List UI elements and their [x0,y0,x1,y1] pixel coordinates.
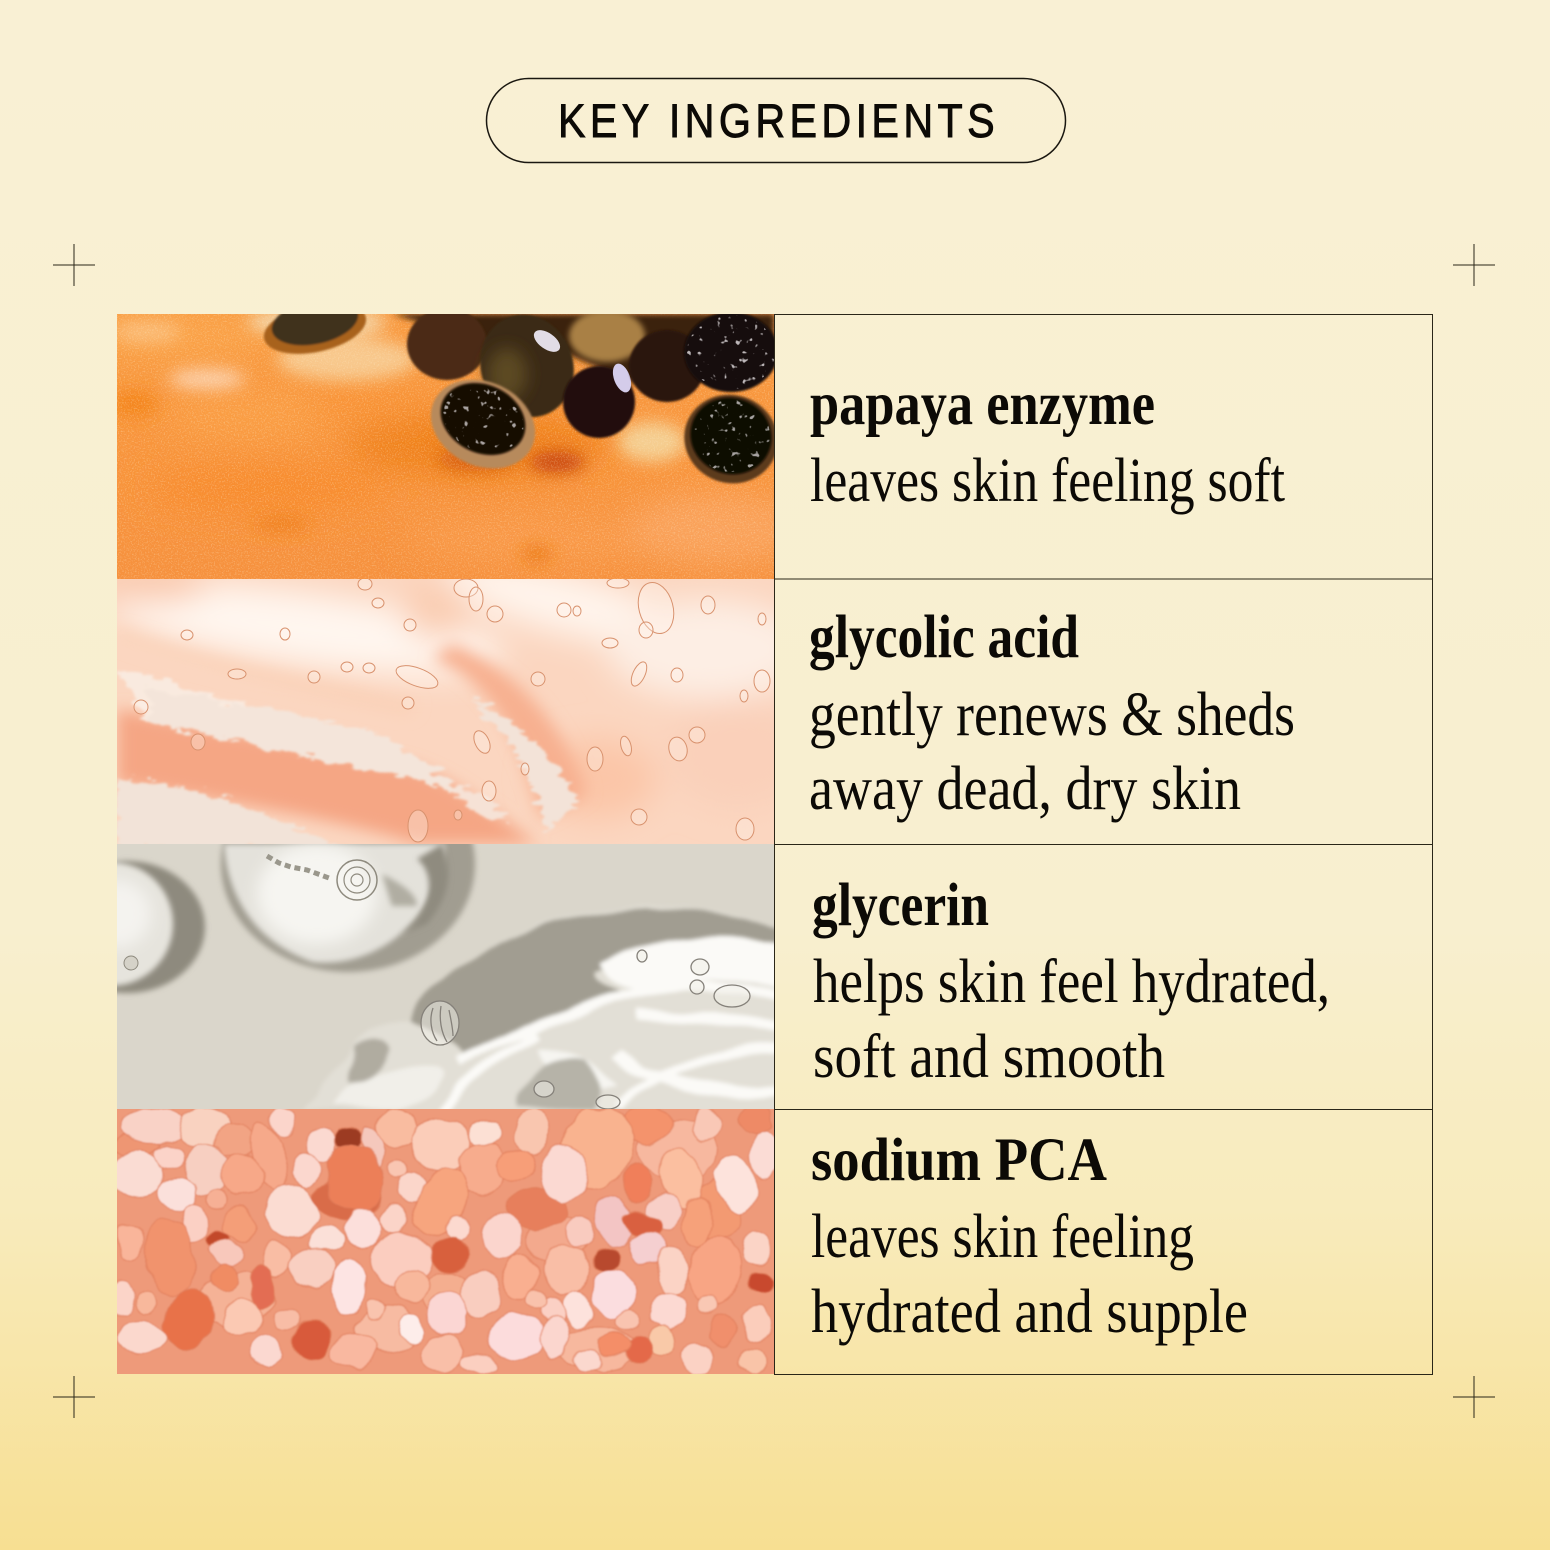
seed: top edge dark mass [392,314,774,384]
text block: glycerin: glycerin [812,872,989,939]
photo: glycolic acid gel with droplets [117,579,774,844]
text block: papaya enzyme [810,371,1285,515]
icon: crosshair bottom right [1453,1376,1495,1418]
text block: papaya enzyme: papaya enzyme [810,371,1155,438]
gel streaks [117,669,579,849]
text block: sodium PCA: sodium PCA [811,1127,1107,1194]
text block: glycolic acid: gently renews & sheds [809,681,1295,749]
seed: large olive [465,301,589,431]
seed: top right black [684,312,778,392]
icon: crosshair top right [1453,244,1495,286]
icon: crosshair top left [53,244,95,286]
text block: glycerin: helps skin feel hydrated, [813,948,1330,1016]
seed: translucent amber between seeds [569,310,645,362]
icon: crosshair bottom left [53,1376,95,1418]
seed: back right [629,330,705,402]
gel pool: lower right [302,906,782,1114]
table: ingredient grid [774,314,1432,1374]
text block: sodium PCA: hydrated and supple [811,1278,1248,1346]
photo: glycerin gel drops [117,844,774,1109]
photo: papaya flesh with seeds [117,314,774,579]
seed: top centre brown [407,308,487,380]
title pill: KEY INGREDIENTS [486,78,1066,162]
droplets [134,578,770,842]
text block: glycolic acid: glycolic acid [809,604,1079,671]
photo: pink salt crystals [117,1109,774,1374]
text block: sodium PCA [811,1127,1248,1346]
text block: glycolic acid [809,604,1295,823]
seed: right black lower [672,382,790,496]
text block: glycolic acid: away dead, dry skin [809,755,1241,823]
seed: front centre with rim [416,363,550,485]
title pill: KEY INGREDIENTS: KEY INGREDIENTS [558,94,999,147]
drop: left [49,861,205,993]
seed: dark behind centre [563,361,635,438]
text block: glycerin: soft and smooth [813,1023,1165,1091]
text block: papaya enzyme: leaves skin feeling soft [810,447,1285,515]
drop: top centre with bubbles [221,756,475,972]
seed: top left [259,291,371,362]
text block: sodium PCA: leaves skin feeling [811,1203,1194,1271]
text block: glycerin [812,872,1330,1091]
